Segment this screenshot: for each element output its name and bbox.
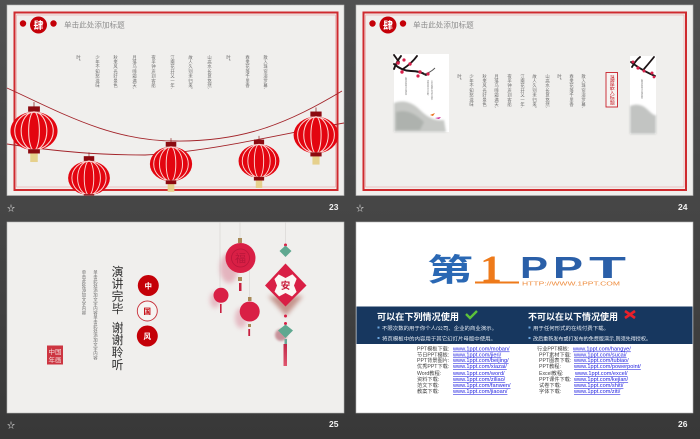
slide 24 vertical body text: 少年不知愁滋味 — [469, 74, 474, 108]
right link list — [537, 344, 641, 395]
allowed column: 将页模板中的内容用于其它幻灯片母版中使用。 — [382, 336, 496, 342]
left link list: www.1ppt.com/word/ — [452, 371, 505, 377]
ornament: 福 medallion: 福 — [235, 251, 246, 265]
slide 24 vertical body text: 秋来风光好景色 — [482, 73, 488, 107]
left ink painting: 春风得意花开满园 — [404, 76, 407, 95]
slide 23 star icon: ☆ — [7, 204, 15, 213]
circle: 中: 中 — [145, 280, 152, 290]
circle: 国: 国 — [144, 307, 151, 316]
ornament: 安 diamond: 安 — [281, 280, 290, 292]
left ink painting: 山水相依云深不知处 — [430, 79, 433, 101]
right link list: Excel教程: — [539, 369, 564, 377]
slide 23 header — [20, 16, 125, 34]
slide 24 vertical body text: 月落乌啼霜满天, — [494, 74, 500, 108]
not allowed column — [528, 311, 651, 342]
red seal stamp: 年画 — [48, 355, 62, 364]
slide 23 vertical body text: 故人久别未归来。 — [188, 54, 194, 93]
slide 23 vertical body text: 夜半钟声到客船 — [151, 54, 156, 89]
left ink painting: 清风明月共此时 — [426, 79, 429, 96]
slide 24 header: 肆 — [383, 19, 393, 32]
slide 24 number: 24 — [678, 202, 688, 212]
slide 24 vertical body text: 春来花落千里香 — [569, 73, 574, 108]
slide 25 star icon: ☆ — [7, 421, 15, 430]
left link list: www.1ppt.com/fanwen/ — [452, 383, 511, 389]
left link list: 资料下载: — [417, 375, 439, 383]
right ink painting: 春风得意花开满园时 — [640, 78, 643, 100]
ornament: 福 medallion — [220, 238, 256, 291]
ornament: medium medallion — [235, 297, 260, 336]
1PPT logo: 1 — [480, 248, 502, 290]
red seal stamp — [47, 346, 63, 364]
left link list: www.1ppt.com/ziliao/ — [452, 377, 506, 383]
slide 26 number: 26 — [678, 419, 688, 429]
slide 26 paper — [356, 222, 693, 413]
allowed column: 不限次数的用于你个人/公司、企业的商业演示。 — [382, 325, 497, 332]
slide 26: 1PPT notice — [356, 222, 693, 429]
slide 23 red frame — [14, 12, 338, 190]
hanging strings — [220, 222, 286, 300]
slide 24 header: 单击此处添加标题 — [413, 20, 474, 30]
circle: 风: 风 — [144, 332, 152, 341]
left link list: PPT模板下载: — [417, 344, 449, 352]
circle: 风 — [137, 326, 158, 346]
slide 24 red frame — [364, 12, 686, 190]
left link list: www.1ppt.com/beijing/ — [452, 358, 509, 364]
slide 23: lanterns — [7, 5, 344, 213]
red seal stamp: 中国 — [48, 347, 62, 356]
vertical thanks title: 演讲完毕 谢谢聆听 — [110, 265, 124, 371]
left link list: 节日PPT模板: — [417, 350, 449, 358]
right link list: www.1ppt.com/kejian/ — [573, 377, 629, 383]
1PPT logo: P — [520, 251, 548, 285]
allowed column — [377, 311, 497, 342]
left link list: 优秀PPT下载: — [417, 362, 449, 370]
right link list: 行业PPT模板: — [537, 344, 569, 352]
right link list: 字体下载: — [539, 387, 561, 395]
slide 25: thanks — [7, 222, 344, 430]
1PPT logo: 第 — [427, 253, 473, 288]
right link list: www.1ppt.com/excel/ — [574, 371, 628, 377]
left link list: www.1ppt.com/xiazai/ — [452, 364, 507, 370]
slide 23 vertical body text: 散入珠帘湿罗幕, — [263, 54, 268, 90]
left ink painting — [394, 54, 449, 132]
slide 25 number: 25 — [329, 419, 339, 429]
slide 23 number: 23 — [329, 202, 339, 212]
right link list: www.1ppt.com/shiti/ — [573, 383, 624, 389]
red vertical title box: 温度嵌入标题 — [609, 74, 615, 106]
right link list: 试卷下载: — [539, 381, 561, 389]
right link list: PPT素材下载: — [539, 350, 571, 358]
1PPT logo — [427, 248, 627, 290]
slide 23 header: 肆 — [34, 19, 44, 32]
vertical small text — [81, 269, 98, 361]
right link list: www.1ppt.com/hangye/ — [572, 346, 631, 352]
right ink painting — [630, 56, 656, 134]
red vertical title box — [606, 72, 618, 107]
slide 24 vertical body text: 时。 — [557, 73, 562, 83]
right link list: PPT教程: — [539, 362, 561, 370]
right link list: PPT课件下载: — [539, 375, 571, 383]
lanterns — [10, 102, 338, 206]
left link list: Word教程: — [417, 369, 441, 377]
not allowed column: 用于任何形式的在线付费下载。 — [533, 325, 609, 332]
slide 24 star icon: ☆ — [356, 204, 364, 213]
right link list: www.1ppt.com/ziti/ — [573, 389, 621, 395]
slide 23 vertical body text: 江南花开又一年, — [170, 54, 176, 90]
left link list: 范文下载: — [417, 381, 439, 389]
vertical small text: 单击此处添加文字内容单击此处添加文字内容 — [93, 269, 98, 361]
left link list: www.1ppt.com/moban/ — [452, 346, 510, 352]
slide 23 header: 单击此处添加标题 — [64, 20, 125, 30]
not allowed column: 改后重新发布或打发布的免费版演示,则须先得授权。 — [533, 336, 651, 342]
slide 24 vertical body text: 散入珠帘湿罗幕, — [581, 73, 586, 108]
1PPT logo: P — [553, 251, 583, 285]
right link list: www.1ppt.com/sucai/ — [573, 352, 627, 358]
slide 24 vertical body text: 时。 — [457, 73, 462, 83]
hanging strings — [7, 88, 344, 155]
slide 24 header — [369, 16, 474, 34]
1PPT logo: HTTP://WWW.1PPT.COM — [522, 282, 620, 288]
slide 24: ink painting — [356, 5, 693, 213]
slide 24 vertical body text: 夜半钟声到客船 — [507, 73, 512, 108]
right link list: www.1ppt.com/powerpoint/ — [573, 364, 641, 370]
slide 23 vertical body text: 山高水长意悠然, — [207, 54, 212, 90]
left link list — [417, 344, 511, 395]
left link list: www.1ppt.com/jiaoan/ — [452, 389, 508, 395]
left link list: PPT背景图片: — [417, 356, 449, 364]
slide 23 vertical body text: 时。 — [76, 54, 82, 64]
slide 24 vertical body text: 故人久别未归来。 — [532, 73, 538, 112]
circle: 国 — [137, 301, 157, 321]
1PPT logo: T — [589, 251, 627, 285]
slide 24 vertical body text: 山高水长意悠然, — [545, 73, 550, 108]
navy usage band — [356, 306, 692, 344]
slide 23 vertical body text — [76, 54, 268, 93]
not allowed column: 不可以在以下情况使用 — [528, 311, 618, 322]
right link list: www.1ppt.com/tubiao/ — [573, 358, 629, 364]
allowed column: 可以在下列情况使用 — [377, 311, 459, 322]
slide 24 vertical body text: 江南花开又一年, — [520, 73, 526, 108]
slide 25 paper — [7, 222, 344, 413]
slide 23 vertical body text: 月落乌啼霜满天, — [132, 55, 138, 90]
slide 23 paper — [7, 5, 344, 196]
slide 24 vertical body text — [457, 73, 586, 112]
slide 23 vertical body text: 少年不知愁滋味 — [95, 55, 100, 89]
vertical small text: 单击此处添加文字内容 — [81, 269, 87, 316]
ornament: green knots and tassel — [275, 244, 293, 366]
circle: 中 — [138, 275, 159, 296]
right link list: PPT图表下载: — [539, 356, 571, 364]
ornament: small medallion — [210, 288, 228, 313]
ornament: 安 diamond — [265, 264, 306, 316]
slide 24 paper — [356, 5, 693, 196]
slide 23 vertical body text: 春来花落千里香 — [245, 54, 250, 89]
slide 23 vertical body text: 时。 — [226, 54, 232, 64]
left link list: www.1ppt.com/jieri/ — [452, 352, 502, 358]
left link list: 教案下载: — [417, 387, 439, 395]
slide 23 vertical body text: 秋来风光好景色 — [113, 54, 118, 88]
